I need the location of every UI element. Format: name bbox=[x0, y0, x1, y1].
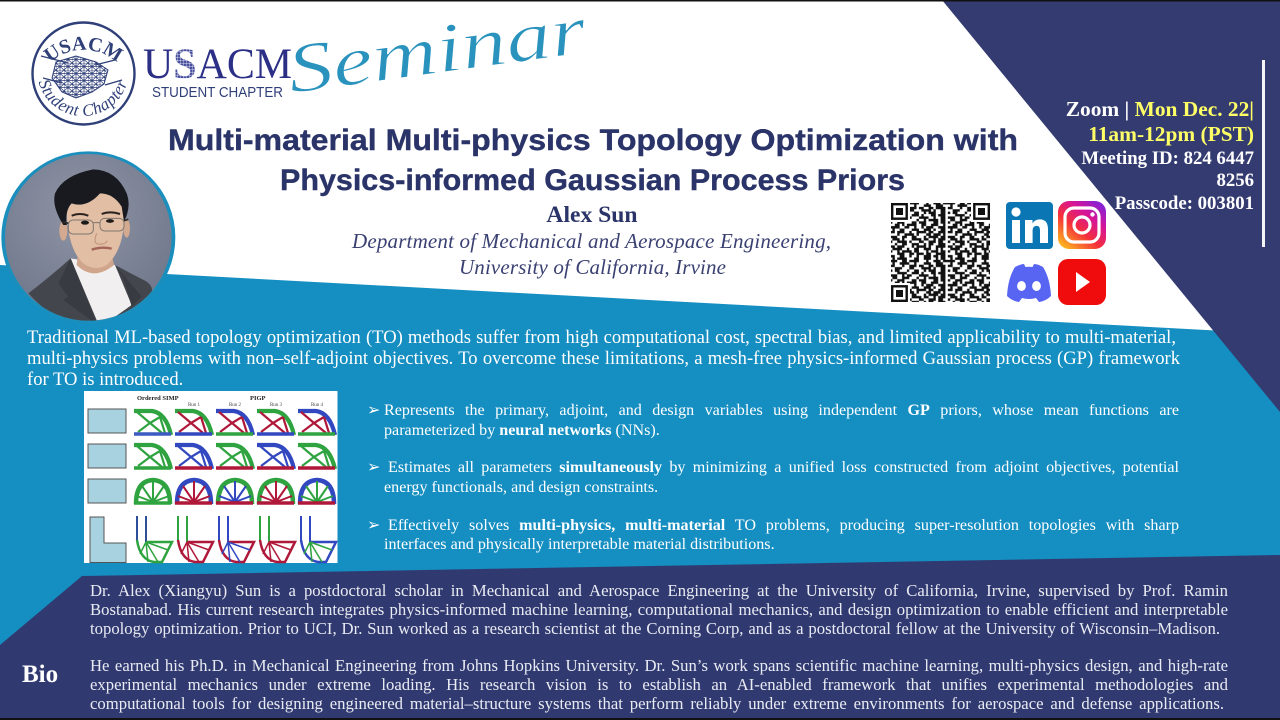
event details: 11am-12pm (PST) bbox=[1088, 122, 1254, 146]
row 4 bbox=[137, 516, 172, 562]
event details bbox=[1066, 97, 1254, 214]
bullet 1: parameterized by neural networks (NNs). bbox=[384, 422, 660, 438]
QR code bbox=[891, 203, 990, 302]
speaker name and affiliation: Department of Mechanical and Aerospace Engineering, bbox=[351, 229, 831, 253]
bullet 2: energy functionals, and design constraints. bbox=[384, 478, 658, 496]
results figure: Run 4 bbox=[311, 403, 324, 408]
bullet 1: ➢ bbox=[367, 402, 380, 419]
logo: USACM wordmark: STUDENT CHAPTER bbox=[152, 85, 283, 101]
bullet 2: ➢ bbox=[367, 459, 380, 476]
event details: Zoom | Mon Dec. 22| bbox=[1066, 97, 1254, 121]
intro abstract: Traditional ML-based topology optimization (TO) methods suffer from high computational cost, spectral bias, and limited applicability to multi-material, bbox=[27, 327, 1176, 348]
bullet 2: Estimates all parameters simultaneously by minimizing a unified loss constructed from adjoint objectives, potential bbox=[388, 459, 1179, 476]
bio paragraph 1: Dr. Alex (Xiangyu) Sun is a postdoctoral scholar in Mechanical and Aerospace Engineering at the University of California, Irvine, supervised by Prof. Ramin bbox=[90, 581, 1228, 600]
icon: Discord bbox=[1007, 264, 1051, 302]
bullet 3: interfaces and physically interpretable material distributions. bbox=[384, 536, 775, 553]
bio paragraph 1: Bostanabad. His current research integrates physics-informed machine learning, computational mechanics, and design optimization to enable efficient and interpretable bbox=[90, 600, 1228, 619]
results figure: Run 1 bbox=[188, 403, 201, 408]
icon: YouTube bbox=[1058, 259, 1106, 305]
intro abstract bbox=[27, 327, 1180, 390]
results figure: Run 2 bbox=[229, 403, 242, 408]
speaker name and affiliation: University of California, Irvine bbox=[459, 255, 726, 279]
title: Physics-informed Gaussian Process Priors bbox=[280, 164, 905, 197]
bullet 3: Effectively solves multi-physics, multi-material TO problems, producing super-resolution topologies with sharp bbox=[388, 517, 1179, 534]
results figure: Run 3 bbox=[270, 403, 283, 408]
results figure: PIGP bbox=[250, 395, 266, 402]
bullet 2 bbox=[367, 459, 1179, 496]
title bbox=[168, 124, 1018, 197]
bullet 3 bbox=[367, 517, 1179, 553]
bullet 3: ➢ bbox=[367, 517, 380, 534]
bio paragraph 1 bbox=[90, 581, 1228, 638]
row 3 bbox=[134, 480, 171, 504]
logo: USACM wordmark: USACM bbox=[143, 41, 292, 88]
bullet 1: Represents the primary, adjoint, and design variables using independent GP priors, whose mean functions are bbox=[384, 402, 1179, 419]
icon: Instagram bbox=[1058, 201, 1106, 249]
logo: USACM student chapter badge bbox=[31, 21, 136, 126]
logo: USACM student chapter badge: Student Chapter bbox=[38, 80, 126, 116]
title: Multi-material Multi-physics Topology Optimization with bbox=[168, 124, 1018, 157]
results figure: Ordered SIMP bbox=[137, 395, 179, 402]
event details: Meeting ID: 824 6447 bbox=[1081, 148, 1254, 169]
intro abstract: for TO is introduced. bbox=[27, 369, 183, 390]
intro abstract: multi-physics problems with non–self-adjoint objectives. To overcome these limitations, a mesh-free physics-informed Gaussian process (GP) framework bbox=[27, 348, 1180, 369]
bio paragraph 2: He earned his Ph.D. in Mechanical Engineering from Johns Hopkins University. Dr. Sun’s work spans scientific machine learning, multi-physics design, and high-rate bbox=[90, 656, 1228, 675]
row 2 bbox=[134, 445, 171, 469]
bio label: Bio bbox=[22, 661, 58, 688]
event details: Passcode: 003801 bbox=[1115, 193, 1254, 214]
white vertical rule bbox=[1262, 60, 1265, 247]
icon: LinkedIn bbox=[1006, 202, 1053, 249]
results figure bbox=[84, 391, 338, 564]
bullet 1 bbox=[367, 402, 1179, 438]
logo: USACM student chapter badge: USACM bbox=[42, 36, 124, 62]
speaker name and affiliation: Alex Sun bbox=[546, 202, 638, 228]
speaker name and affiliation bbox=[351, 202, 831, 279]
bio paragraph 2: experimental mechanics under extreme loading. His research vision is to establish an AI-enabled framework that unifies experimental methodologies and bbox=[90, 675, 1228, 694]
speaker photo bbox=[1, 151, 176, 321]
event details: 8256 bbox=[1216, 170, 1254, 191]
bio paragraph 1: topology optimization. Prior to UCI, Dr. Sun worked as a research scientist at the Corning Corp, and as a postdoctoral fellow at the University of Wisconsin–Madison. bbox=[90, 619, 1220, 638]
bio paragraph 2 bbox=[90, 656, 1228, 713]
bio paragraph 2: computational tools for designing engineered material–structure systems that perform reliably under extreme environments for aerospace and defense applications. bbox=[90, 694, 1224, 713]
row 1 bbox=[134, 411, 171, 435]
